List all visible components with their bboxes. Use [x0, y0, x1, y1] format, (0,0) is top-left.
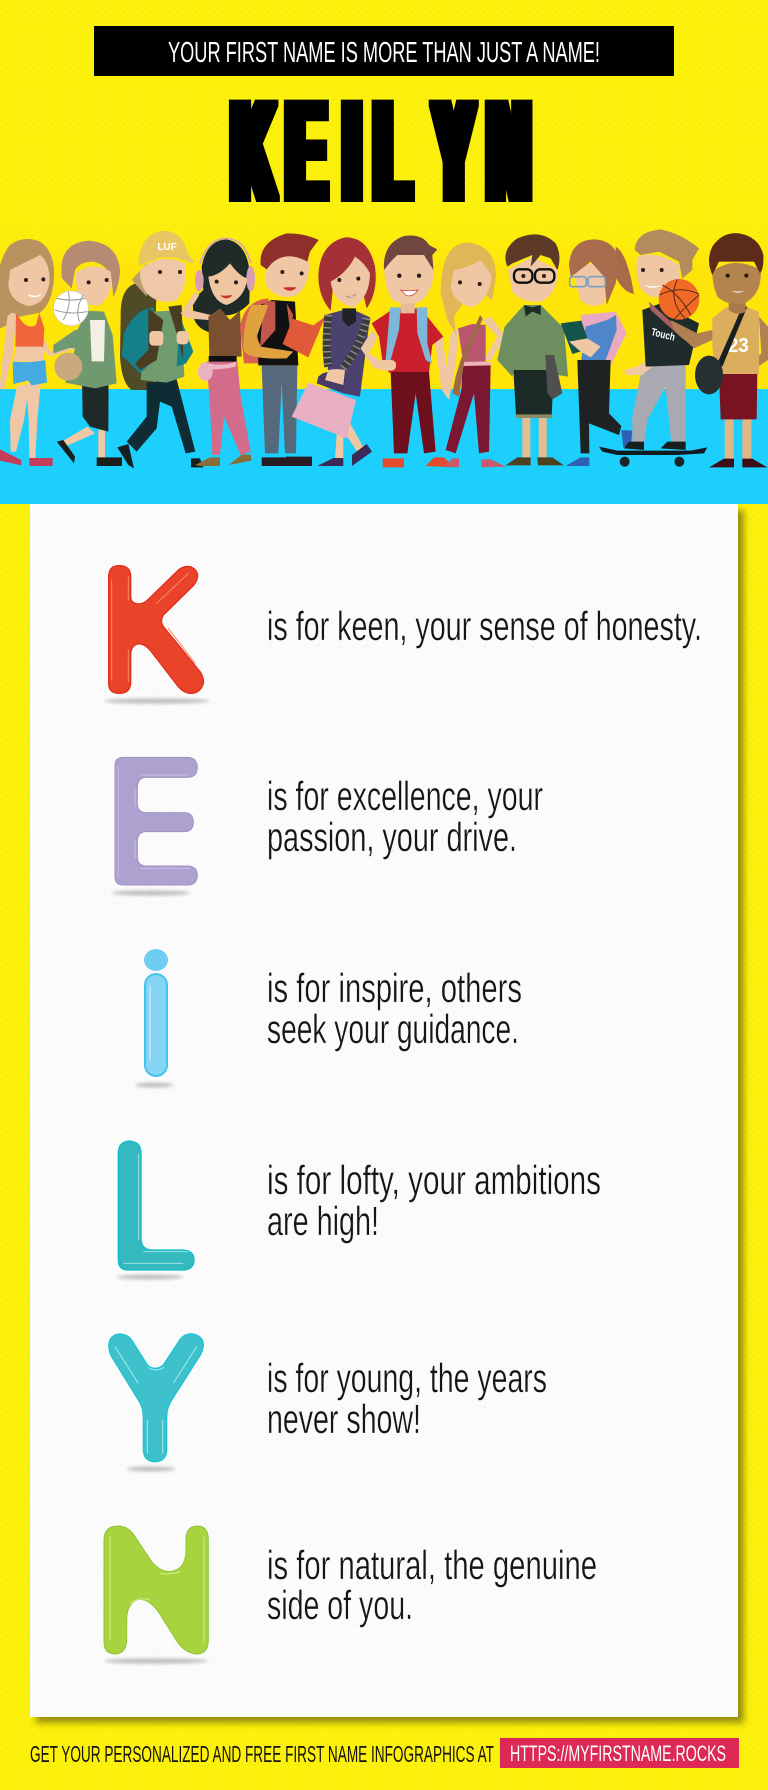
character: boy in basketball jersey with bag — [671, 233, 768, 467]
text L — [267, 1157, 601, 1244]
text E: is for excellence, your — [267, 773, 543, 819]
blue floor band — [0, 389, 768, 504]
character: girl with headphones — [181, 238, 255, 466]
letter L icon — [117, 1141, 194, 1280]
character: boy on skateboard with basketball — [599, 229, 707, 467]
character: backpacker with cap: LUF — [157, 242, 177, 253]
character: boy in basketball jersey with bag: 23 — [728, 334, 749, 357]
character: boy on skateboard with basketball: Touch — [650, 326, 676, 344]
illustration: row of twelve young people — [0, 229, 768, 468]
text L: are high! — [267, 1198, 379, 1244]
row E — [112, 757, 543, 896]
character: girl in orange top — [0, 239, 82, 466]
row K — [104, 566, 702, 704]
text Y: never show! — [267, 1396, 421, 1442]
text E — [267, 773, 543, 860]
main white panel — [30, 504, 744, 1723]
character: girl with red bob and pink bag — [292, 237, 376, 466]
row I — [135, 949, 522, 1087]
text I: seek your guidance. — [267, 1006, 519, 1052]
text Y: is for young, the years — [267, 1355, 547, 1401]
text I — [267, 965, 522, 1052]
text N — [267, 1542, 597, 1628]
row N — [104, 1526, 597, 1664]
character: girl with ponytail and tablet — [561, 239, 634, 466]
text I: is for inspire, others — [267, 965, 522, 1011]
letter K icon — [104, 566, 210, 704]
row Y — [109, 1334, 547, 1472]
character: boy with red hair holding a book — [240, 233, 325, 466]
letter Y icon — [109, 1334, 203, 1472]
letter I icon — [135, 949, 173, 1087]
character: boy in red t-shirt — [361, 236, 454, 467]
text L: is for lofty, your ambitions — [267, 1157, 601, 1203]
row L — [117, 1141, 601, 1280]
text N: is for natural, the genuine — [267, 1542, 597, 1588]
text N: side of you. — [267, 1582, 413, 1628]
character: backpacker with cap — [117, 231, 203, 468]
character: boy with glasses and laptop — [497, 234, 568, 465]
text E: passion, your drive. — [267, 814, 517, 860]
letter N icon — [104, 1526, 208, 1664]
letter E icon — [112, 757, 197, 896]
character: girl with volleyball — [53, 241, 122, 466]
character: blonde girl — [441, 243, 506, 467]
header banner — [94, 26, 674, 76]
text Y — [267, 1355, 547, 1442]
name title: KEILYN — [232, 72, 529, 229]
